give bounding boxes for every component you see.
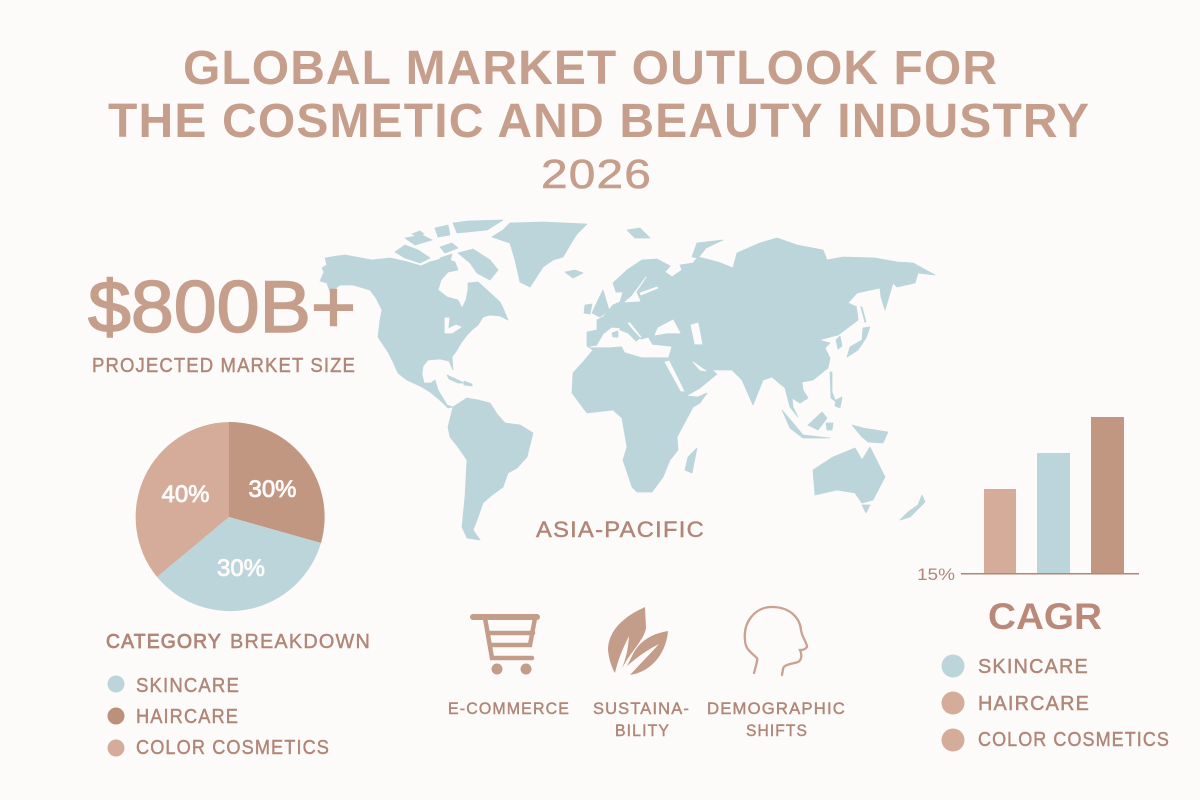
map: Greenland — [492, 222, 587, 287]
map: Cuba and Caribbean — [447, 375, 472, 386]
pie chart — [136, 422, 325, 611]
CAGR legend — [942, 654, 1170, 752]
map: inland seas — [445, 277, 864, 391]
market size figure: $800B+ — [88, 267, 356, 348]
bar chart: 15% — [917, 565, 955, 584]
map: New Zealand — [900, 495, 925, 520]
category legend: COLOR COSMETICS — [136, 737, 330, 759]
title: GLOBAL MARKET OUTLOOK FOR — [183, 42, 997, 95]
region label: ASIA-PACIFIC — [536, 517, 705, 542]
map: Arctic islands — [395, 220, 583, 280]
world map — [320, 220, 935, 540]
driver labels — [448, 699, 846, 740]
pie chart: 30% — [217, 555, 265, 582]
category breakdown heading — [106, 631, 371, 653]
category breakdown heading: CATEGORY — [106, 631, 222, 653]
CAGR legend: COLOR COSMETICS — [978, 729, 1170, 751]
pie chart: 30% — [248, 476, 297, 503]
driver labels: BILITY — [615, 721, 670, 740]
category legend: HAIRCARE — [136, 706, 239, 728]
map: Italy and Mediterranean islands — [612, 325, 654, 343]
category legend: SKINCARE — [136, 675, 240, 697]
title — [108, 42, 1089, 197]
map: South America — [448, 398, 533, 540]
CAGR legend: SKINCARE — [978, 656, 1089, 678]
category breakdown heading: BREAKDOWN — [230, 631, 371, 653]
map: Eurasia and Africa — [572, 238, 935, 492]
driver labels: SHIFTS — [746, 721, 808, 740]
icon: head profile — [745, 607, 807, 675]
market size label: PROJECTED MARKET SIZE — [92, 355, 356, 377]
driver labels: SUSTAINA- — [593, 699, 690, 718]
map: Southeast Asia islands — [782, 372, 888, 443]
driver labels: E-COMMERCE — [448, 699, 570, 718]
map: North America — [320, 255, 508, 408]
pie chart: 40% — [161, 481, 210, 508]
CAGR heading: CAGR — [988, 596, 1102, 637]
category legend — [108, 675, 330, 759]
bar chart — [917, 417, 1139, 584]
title: THE COSMETIC AND BEAUTY INDUSTRY — [108, 95, 1089, 148]
driver labels: DEMOGRAPHIC — [707, 699, 846, 718]
CAGR legend: HAIRCARE — [978, 693, 1090, 715]
map: Madagascar — [685, 448, 697, 473]
map: Japan, Britain, Svalbard, Novaya Zemlya — [584, 228, 870, 357]
icon: leaves — [608, 607, 668, 675]
map: Australia — [813, 447, 885, 513]
title: 2026 — [541, 151, 652, 197]
icon: shopping cart — [473, 617, 537, 674]
